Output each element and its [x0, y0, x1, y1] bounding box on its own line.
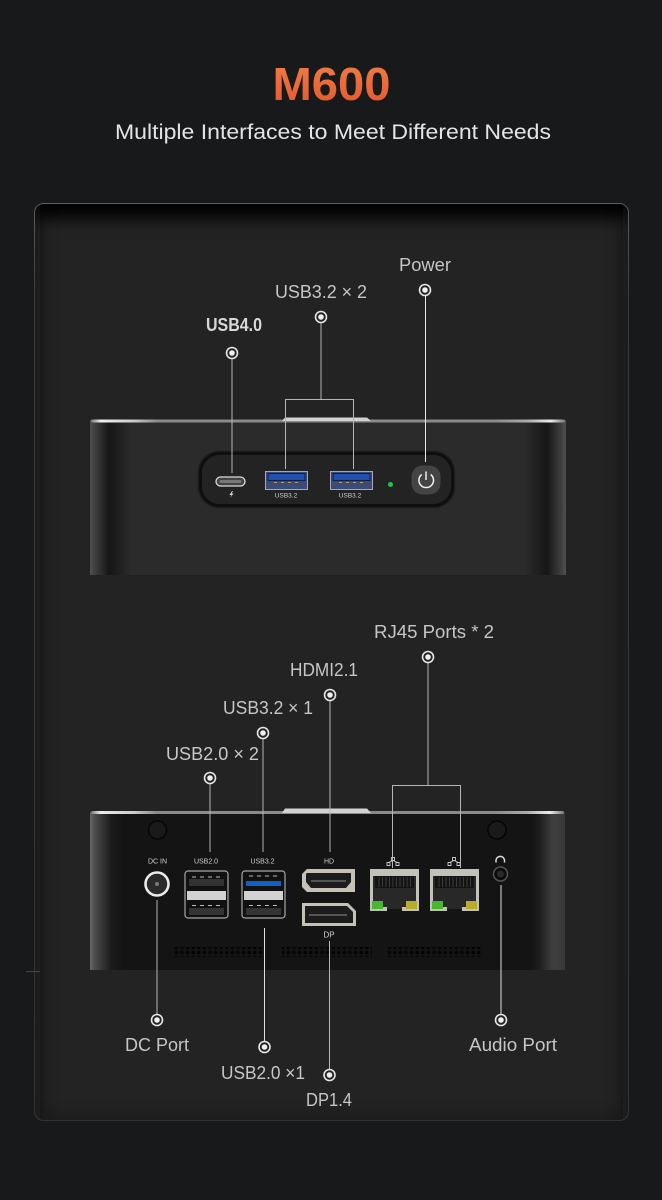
status LED	[388, 482, 393, 487]
RJ45 port right	[430, 858, 479, 911]
callout: Power: Power	[399, 255, 451, 275]
DC jack: DC IN	[148, 858, 167, 866]
DisplayPort: DP	[323, 930, 335, 940]
device: front view	[90, 418, 566, 575]
subtitle: Multiple Interfaces to Meet Different Needs	[115, 121, 551, 144]
USB3.2 port right: USB3.2	[339, 492, 362, 500]
callout: USB3.2 x 2	[275, 282, 367, 469]
callout: DP1.4	[306, 941, 352, 1110]
callout: USB3.2 x 2: USB3.2 × 2	[275, 282, 367, 302]
callout: DP1.4: DP1.4	[306, 1090, 352, 1110]
HDMI port	[302, 858, 355, 892]
USB3.2 port left: USB3.2	[275, 492, 298, 500]
callout: RJ45 Ports * 2: RJ45 Ports * 2	[374, 622, 494, 642]
callout: DC Port: DC Port	[125, 1035, 189, 1055]
USB3.2 port left	[266, 472, 308, 500]
vents	[173, 947, 481, 957]
front port plate	[200, 454, 452, 506]
callout: Audio Port: Audio Port	[469, 1035, 557, 1055]
callout: Audio Port	[469, 885, 557, 1055]
callout: USB3.2 x 1	[223, 698, 313, 852]
USB2.0 dual port	[185, 858, 228, 918]
callout: DC Port	[125, 900, 189, 1055]
DisplayPort	[302, 903, 356, 940]
USB2.0 dual port: USB2.0	[194, 858, 218, 866]
callout: USB2.0 x 2	[166, 744, 259, 852]
screw holes	[148, 821, 506, 839]
callout: USB2.0 x 2: USB2.0 × 2	[166, 744, 259, 764]
DC jack	[146, 858, 168, 896]
callout: Power	[399, 255, 451, 462]
panel: ports showcase	[20, 190, 643, 1126]
USB3.2 dual port: USB3.2	[250, 858, 275, 866]
callout: USB4.0	[206, 315, 262, 473]
RJ45 port left	[370, 858, 419, 911]
callout: HDMI2.1	[290, 660, 358, 852]
callout: RJ45 Ports * 2	[374, 622, 494, 868]
callout: USB2.0 x1: USB2.0 ×1	[221, 1063, 305, 1083]
title: M600	[272, 58, 390, 110]
callout: USB3.2 x 1: USB3.2 × 1	[223, 698, 313, 718]
device: rear view	[90, 808, 565, 970]
callout: USB4.0: USB4.0	[206, 315, 262, 335]
power button	[412, 466, 440, 494]
USB4.0 port	[216, 477, 245, 498]
HDMI port: HD	[324, 858, 334, 866]
USB3.2 dual port	[242, 858, 285, 918]
callout: HDMI2.1: HDMI2.1	[290, 660, 358, 680]
USB3.2 port right	[330, 472, 372, 500]
audio jack	[494, 856, 508, 881]
callout: USB2.0 x1	[221, 928, 305, 1083]
